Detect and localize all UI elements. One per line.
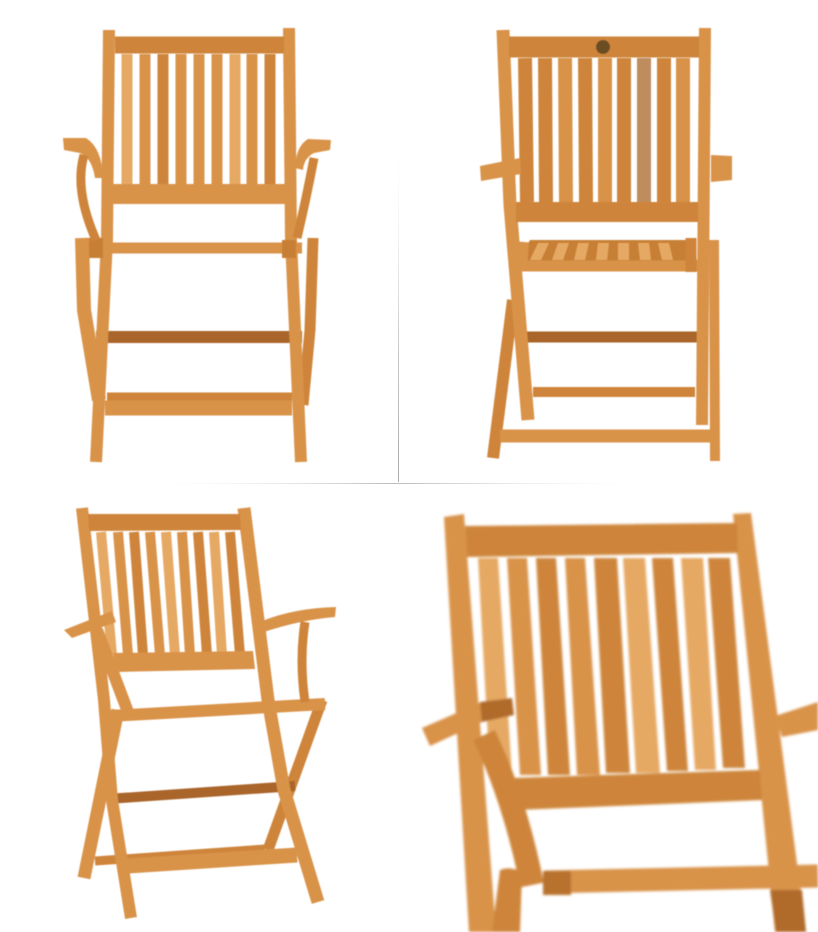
icon: brass medallion	[596, 40, 610, 54]
photo: chair front view	[63, 28, 331, 462]
photo: chair close-up	[422, 513, 818, 932]
photo: chair three-quarter view	[64, 508, 336, 918]
photo: chair back view	[480, 28, 732, 461]
